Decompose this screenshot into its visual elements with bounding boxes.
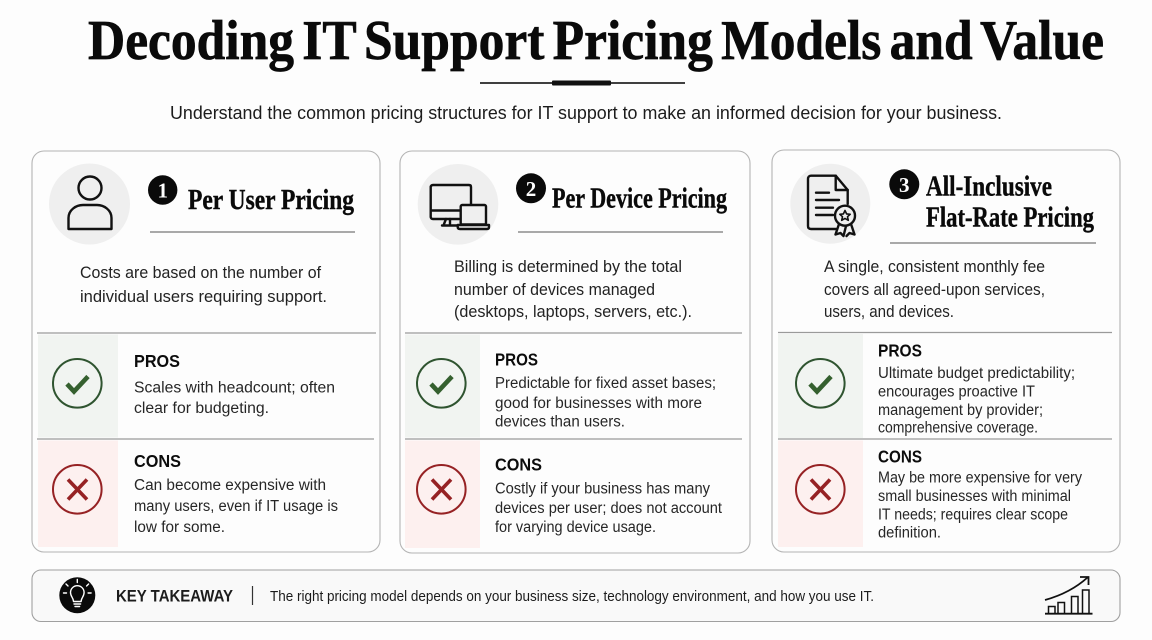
icon: cross [796, 465, 845, 514]
icon: check [417, 359, 466, 408]
pros text: Predictable for fixed asset bases; [495, 375, 716, 392]
description: users, and devices. [824, 302, 954, 321]
description [824, 257, 1045, 321]
pros text: encourages proactive IT [878, 384, 1035, 401]
pros text: Ultimate budget predictability; [878, 365, 1075, 382]
description: (desktops, laptops, servers, etc.). [454, 302, 692, 321]
number badge 2 [516, 173, 546, 203]
icon: cross [53, 465, 102, 514]
description [80, 263, 327, 306]
description: individual users requiring support. [80, 287, 327, 306]
pros text: clear for budgeting. [134, 400, 269, 417]
description: A single, consistent monthly fee [824, 257, 1045, 276]
description: covers all agreed-upon services, [824, 280, 1045, 299]
description: Costs are based on the number of [80, 263, 321, 282]
icon: check [53, 359, 102, 408]
cons text: Costly if your business has many [495, 480, 710, 497]
icon: growth chart [1045, 577, 1092, 614]
number badge 1: 1 [157, 178, 168, 202]
icon: light bulb [59, 577, 95, 613]
pros text [878, 341, 1075, 437]
cons text: small businesses with minimal [878, 488, 1071, 505]
pros text: good for businesses with more [495, 395, 702, 412]
icon: user [68, 176, 112, 229]
heading: all-inclusive flat-rate pricing: Flat-Rate Pricing [926, 202, 1094, 234]
panel: key takeaway [32, 570, 1120, 622]
title underline [480, 80, 685, 86]
cons text: definition. [878, 524, 941, 541]
description [454, 257, 692, 321]
icon: cross [417, 465, 466, 514]
number badge 3 [889, 169, 919, 199]
heading: all-inclusive flat-rate pricing [926, 171, 1094, 234]
pros text: PROS [495, 350, 538, 370]
icon: contract with seal [808, 176, 855, 236]
cons text: CONS [495, 455, 542, 475]
cons text: low for some. [134, 519, 225, 536]
number badge 1 [148, 175, 177, 205]
pros text: management by provider; [878, 402, 1043, 419]
pros text [495, 350, 716, 431]
subtitle: Understand the common pricing structures for IT support to make an informed decision for your business. [170, 102, 1002, 123]
icon: check [796, 359, 845, 408]
pros text: devices than users. [495, 414, 625, 431]
key takeaway text: The right pricing model depends on your business size, technology environment, and how you use IT. [270, 589, 874, 605]
cons text: Can become expensive with [134, 477, 326, 494]
number badge 3: 3 [899, 173, 910, 197]
cons text: CONS [878, 447, 922, 467]
pros text [134, 351, 335, 417]
pros text: PROS [134, 351, 180, 371]
cons text: May be more expensive for very [878, 470, 1082, 487]
panel: all-inclusive flat-rate pricing [772, 150, 1120, 552]
cons text: for varying device usage. [495, 519, 656, 536]
cons text [878, 447, 1082, 541]
pros text: PROS [878, 341, 922, 361]
cons text: CONS [134, 451, 181, 471]
pros text: Scales with headcount; often [134, 380, 335, 397]
panel: per user pricing [32, 151, 380, 552]
cons text [134, 451, 338, 536]
heading: all-inclusive flat-rate pricing: All-Inclusive [926, 171, 1052, 203]
description: Billing is determined by the total [454, 257, 682, 276]
cons text [495, 455, 723, 536]
icon: devices [431, 185, 489, 229]
heading: per device pricing: Per Device Pricing [552, 183, 727, 215]
number badge 2: 2 [526, 177, 536, 201]
cons text: devices per user; does not account [495, 500, 723, 517]
cons text: IT needs; requires clear scope [878, 506, 1068, 523]
description: number of devices managed [454, 280, 655, 299]
key takeaway label: KEY TAKEAWAY [116, 588, 233, 606]
panel: per device pricing [400, 151, 750, 553]
cons text: many users, even if IT usage is [134, 498, 338, 515]
pros text: comprehensive coverage. [878, 420, 1038, 437]
heading: per user pricing: Per User Pricing [188, 184, 354, 216]
